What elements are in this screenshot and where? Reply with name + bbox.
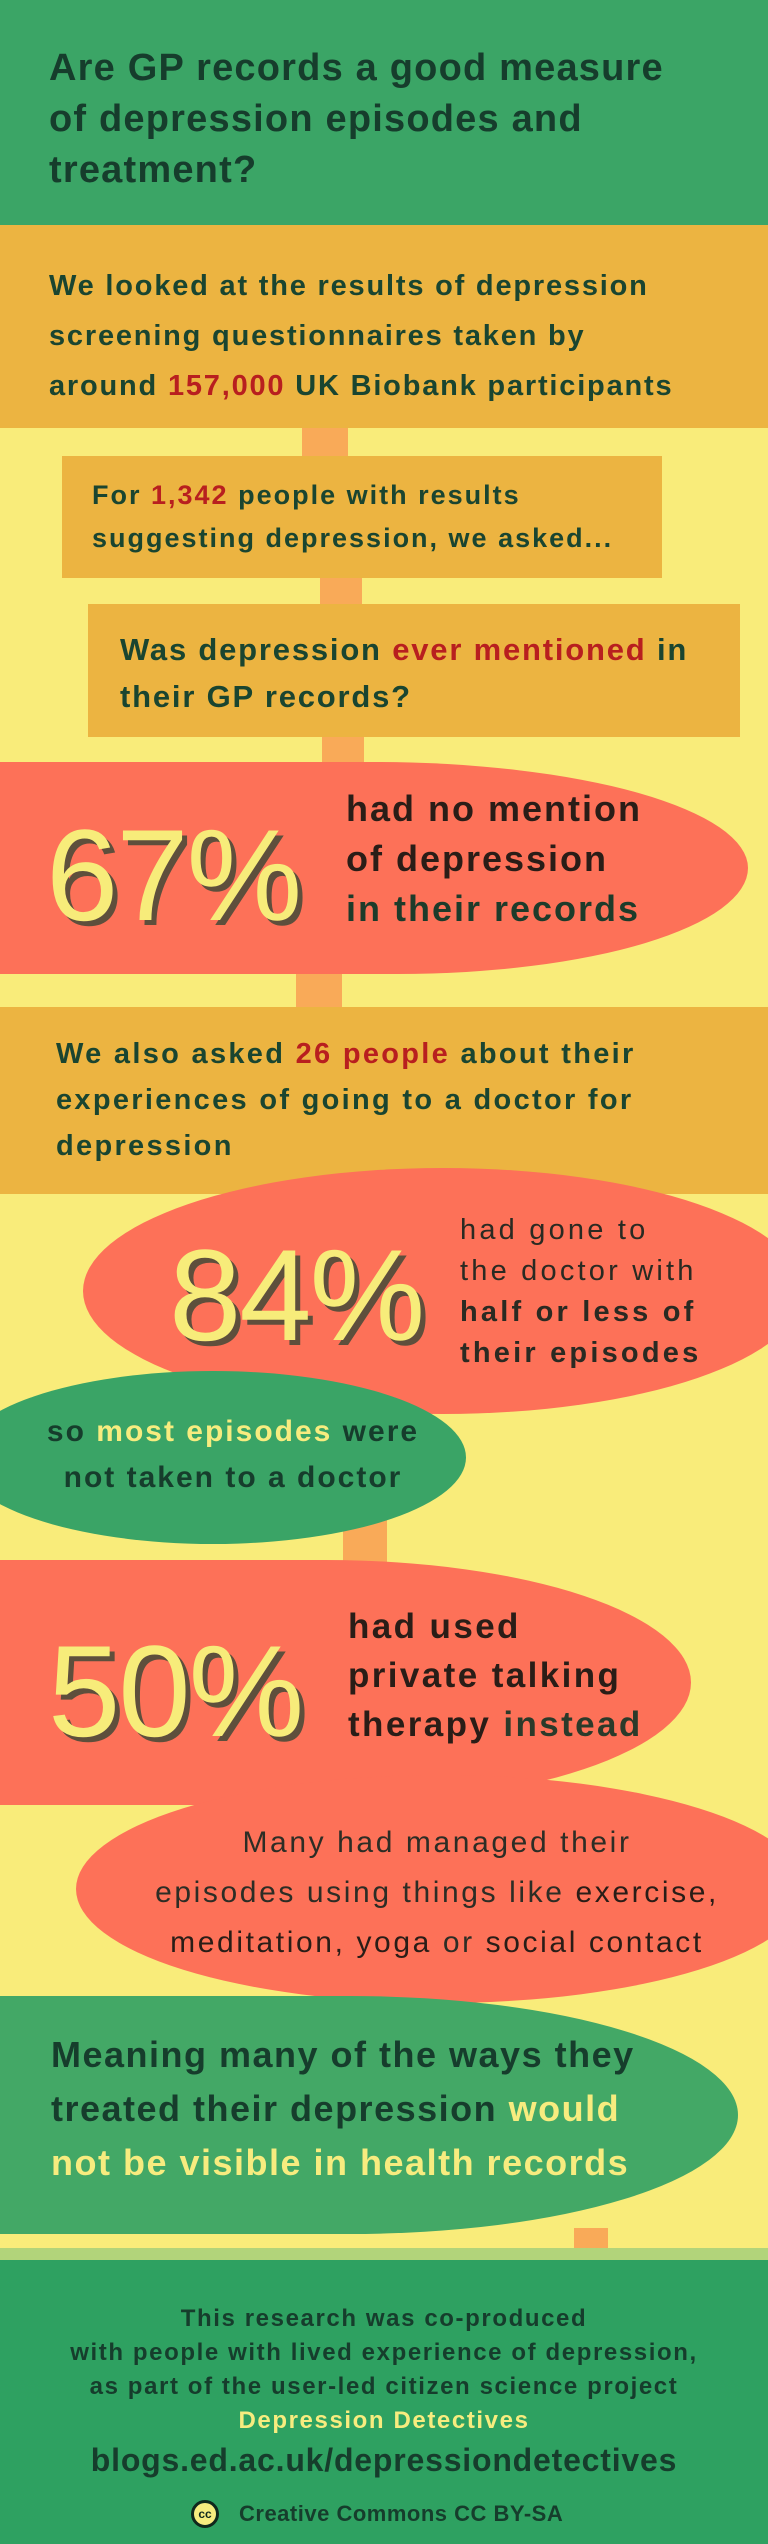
footer text: as part of the user-led citizen science project [90,2373,678,2400]
box text [92,480,613,553]
footer text [70,2305,698,2434]
band text: experiences of going to a doctor for [56,1084,633,1116]
intro text: screening questionnaires taken by [49,320,585,352]
stat label: the doctor with [460,1255,697,1287]
band: 26 people [0,1007,768,1194]
stat label: of depression [346,838,608,879]
stat label [346,788,642,929]
question text: Was depression ever mentioned in [120,632,688,667]
text: meditation, yoga or social contact [170,1926,704,1959]
stat label [348,1607,643,1744]
title: treatment? [49,149,257,191]
box: question [88,604,740,737]
footer text: Depression Detectives [238,2407,530,2434]
question text: their GP records? [120,679,412,714]
text: Many had managed their [242,1826,632,1859]
blob: 84% [83,1168,768,1414]
stat label: had no mention [346,788,642,829]
intro text [49,270,673,402]
text: so most episodes were [47,1415,419,1448]
box text: For 1,342 people with results [92,480,521,510]
license [191,2500,563,2528]
text: not taken to a doctor [64,1461,402,1494]
stat label: therapy instead [348,1705,643,1744]
url: blogs.ed.ac.uk/depressiondetectives [91,2442,677,2478]
header panel [0,0,768,227]
title: Are GP records a good measure [49,47,664,89]
stat label [460,1214,701,1369]
title: of depression episodes and [49,98,583,140]
stat label: had used [348,1607,521,1646]
intro text: around 157,000 UK Biobank participants [49,370,673,402]
band text: depression [56,1130,234,1162]
conclusion text: not be visible in health records [51,2142,629,2183]
blob: 50% [0,1560,691,1805]
conclusion text [51,2034,635,2183]
green blob: conclusion [0,1996,738,2234]
icon: cc: cc [198,2507,212,2521]
box text: suggesting depression, we asked... [92,523,613,553]
license text: Creative Commons CC BY-SA [239,2501,563,2526]
footer text: with people with lived experience of depression, [70,2339,698,2366]
conclusion text: treated their depression would [51,2088,620,2129]
stat label: their episodes [460,1337,701,1369]
green blob: most episodes [0,1371,466,1544]
blob: 67% [0,762,748,974]
footer text: This research was co-produced [181,2305,587,2332]
band text [56,1038,636,1162]
text: episodes using things like exercise, [155,1876,719,1909]
conclusion text: Meaning many of the ways they [51,2034,635,2075]
stat label: had gone to [460,1214,648,1246]
icon: cc [191,2500,219,2528]
box: 1,342 people [62,456,662,578]
stat 67%: 67% [46,802,300,948]
intro band [0,225,768,428]
title [49,47,664,191]
intro text: We looked at the results of depression [49,270,649,302]
stat 84%: 84% [169,1222,423,1368]
band text: We also asked 26 people about their [56,1038,636,1070]
stat label: half or less of [460,1296,697,1328]
question text [120,632,688,714]
text [47,1415,419,1494]
stat 50%: 50% [48,1618,302,1764]
stat label: in their records [346,888,640,929]
stat label: private talking [348,1656,621,1695]
blob: managed episodes [76,1775,768,2003]
text [155,1826,719,1959]
footer [0,2248,768,2544]
